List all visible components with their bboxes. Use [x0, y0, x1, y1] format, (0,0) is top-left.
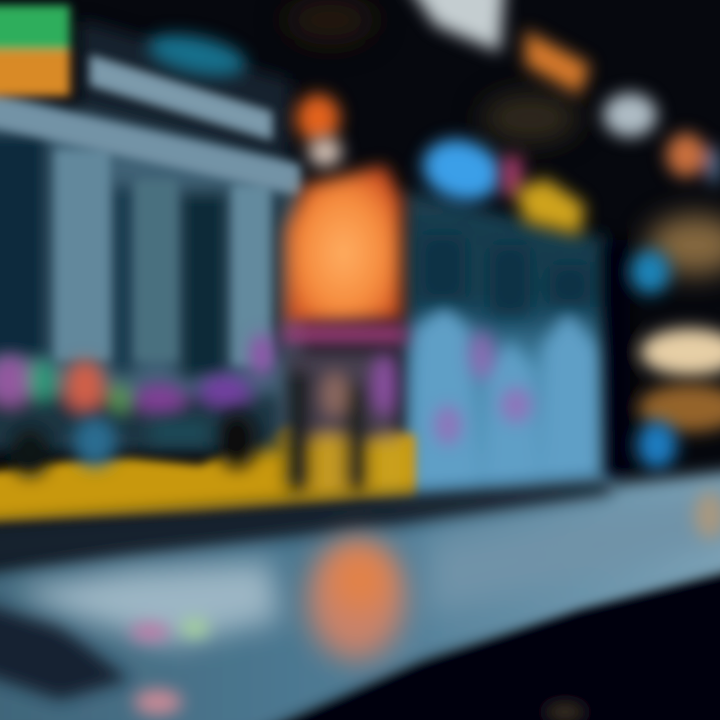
panel: right blue chart: [405, 190, 630, 500]
icon: brown mid glow: [482, 94, 578, 142]
beams: [0, 55, 300, 195]
icon: white top shape: [405, 0, 505, 52]
teal sign: [144, 27, 250, 83]
dark chart blobs: [10, 412, 257, 476]
panel: right tan blurred stack: [630, 215, 720, 469]
icon: magenta accent: [502, 155, 522, 195]
bar: yellow chart band: [0, 425, 415, 525]
panel: left building dashboard: [0, 20, 300, 440]
columns: [55, 150, 270, 365]
icon: top-left green and orange block: [0, 5, 70, 96]
icon: yellow badge: [515, 178, 585, 235]
dark table edge: [250, 568, 720, 720]
icon: multicolour right badge: [666, 133, 720, 185]
icon: bottom glow: [545, 704, 585, 720]
panel: reflective table surface: [0, 470, 720, 720]
icon: brown top glow: [285, 0, 375, 45]
icon: blue oval badge: [416, 131, 508, 209]
icon: white right badge: [603, 93, 657, 137]
icon: orange right badge: [525, 30, 590, 95]
chart peaks: [412, 305, 605, 490]
chart: purple and multicolour line: [0, 333, 280, 476]
panel: central orange column: [282, 94, 407, 496]
